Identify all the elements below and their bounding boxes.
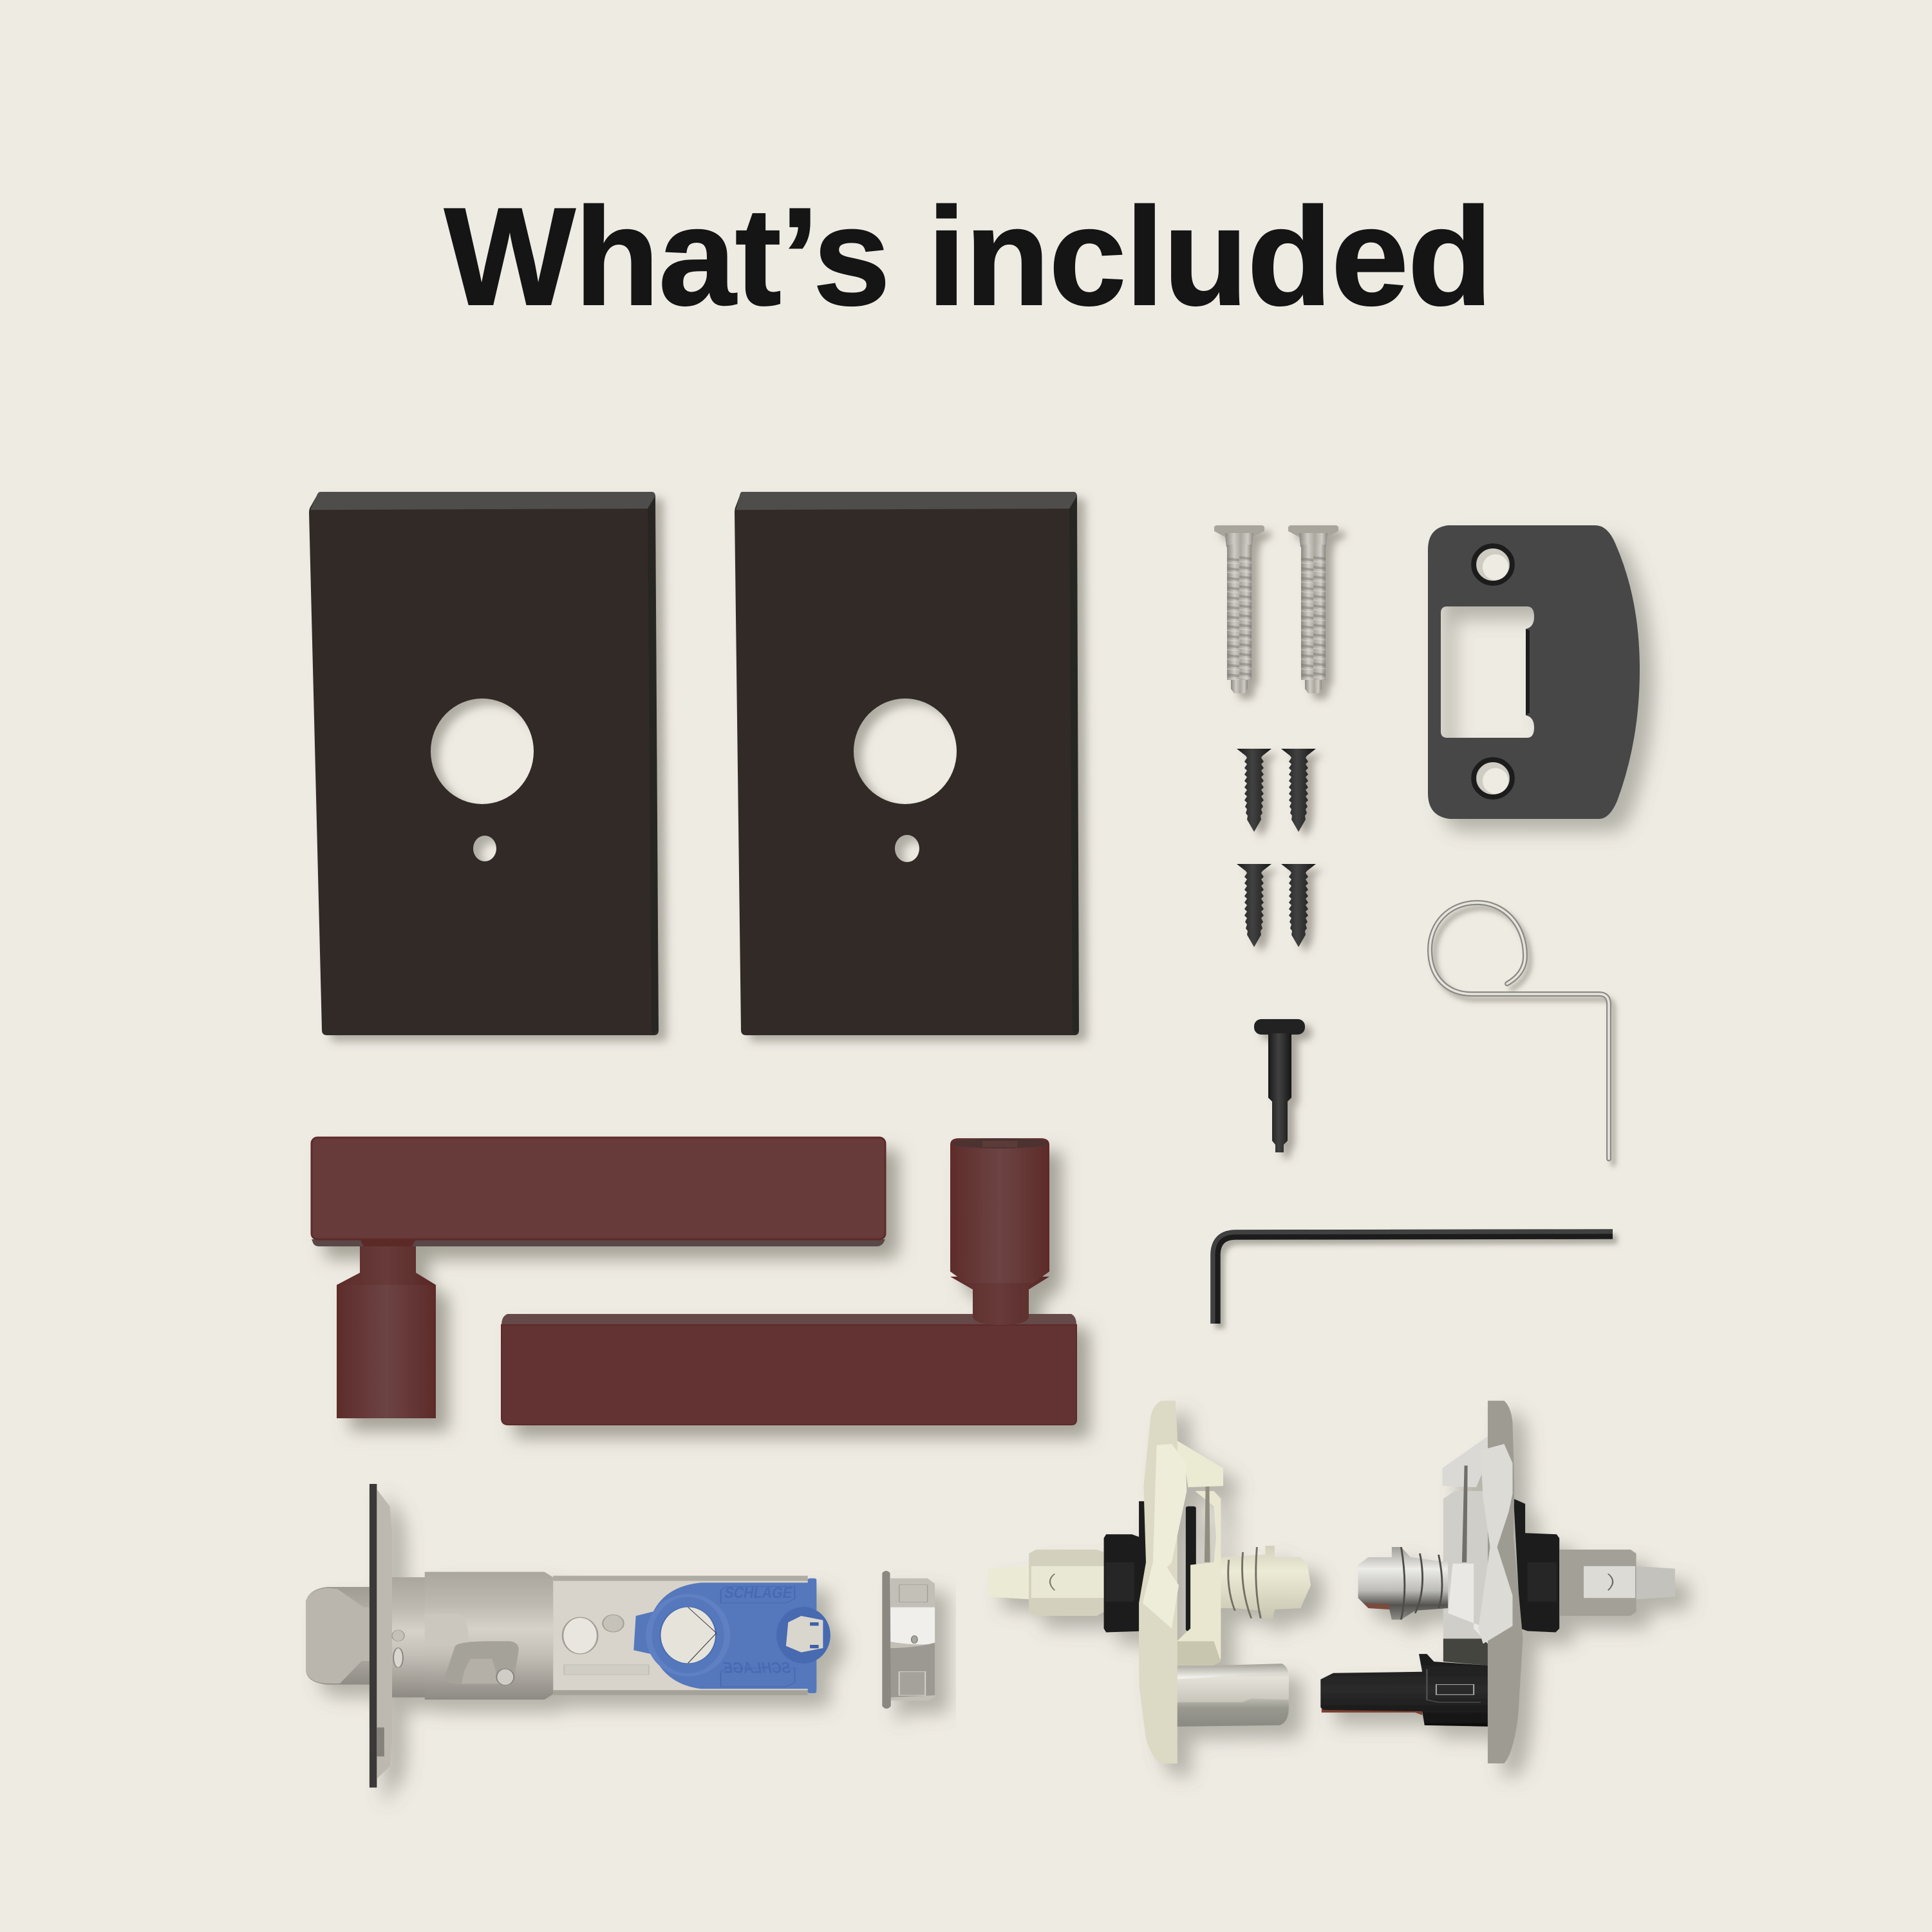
latch bolt — [306, 1587, 370, 1685]
title: What’s included — [444, 178, 1492, 334]
blue clip brand marks: SCHLAGE — [722, 1659, 792, 1676]
lever cylinder — [337, 1243, 436, 1418]
lever neck — [950, 1277, 1049, 1325]
black hub nut — [1514, 1499, 1559, 1633]
latch cylinder — [425, 1572, 553, 1700]
lever bar — [312, 1138, 885, 1239]
spring shaft — [1219, 1546, 1311, 1619]
panel: left door rose plate — [309, 492, 659, 1035]
blue plastic latch clip — [633, 1582, 816, 1689]
centre cam — [1448, 1564, 1488, 1644]
lever neck — [337, 1239, 436, 1285]
lever top side — [502, 1314, 1076, 1325]
ivory rose plate — [1139, 1401, 1177, 1763]
icon: black strike plate — [1428, 525, 1640, 819]
chrome spring shaft — [1358, 1547, 1448, 1620]
panel: latch mechanism — [306, 1484, 830, 1788]
latch housing — [553, 1576, 808, 1695]
grey rose plate — [1488, 1401, 1523, 1763]
black connector — [1320, 1654, 1488, 1727]
mounting tab — [1174, 1439, 1223, 1487]
latch tube — [390, 1577, 427, 1698]
icon: black wood screws — [1237, 749, 1316, 947]
icon: silver machine screw 1 — [1214, 525, 1264, 693]
retaining bracket — [1443, 1491, 1488, 1664]
black hub rear strip — [1186, 1506, 1196, 1631]
retaining bracket — [1174, 1491, 1221, 1665]
panel: left ivory lever assembly — [988, 1401, 1311, 1763]
icon: black retaining pin — [1254, 1019, 1305, 1152]
blue clip brand marks — [720, 1584, 794, 1687]
panel: right silver lever assembly — [1320, 1401, 1675, 1763]
left spindle — [1029, 1550, 1104, 1616]
panel: lower burgundy lever handle — [502, 1138, 1076, 1425]
mounting tab — [1442, 1436, 1488, 1487]
panel: right door rose plate — [735, 492, 1079, 1035]
icon: wire spring clip — [1430, 903, 1609, 1159]
panel: upper burgundy lever handle — [312, 1138, 885, 1418]
lever cylinder — [950, 1138, 1049, 1283]
icon: silver machine screw 2 — [1288, 525, 1338, 693]
icon: hex key — [1213, 1232, 1613, 1324]
red wiring sliver — [1322, 1706, 1422, 1715]
latch faceplate — [370, 1484, 377, 1788]
black hub nut — [1104, 1501, 1146, 1633]
right spindle — [1559, 1550, 1636, 1616]
lever bar — [502, 1325, 1076, 1425]
blue clip brand marks: SCHLAGE — [723, 1584, 794, 1601]
icon: chrome spacer ring — [882, 1571, 935, 1709]
lower spindle housing — [1174, 1664, 1289, 1727]
